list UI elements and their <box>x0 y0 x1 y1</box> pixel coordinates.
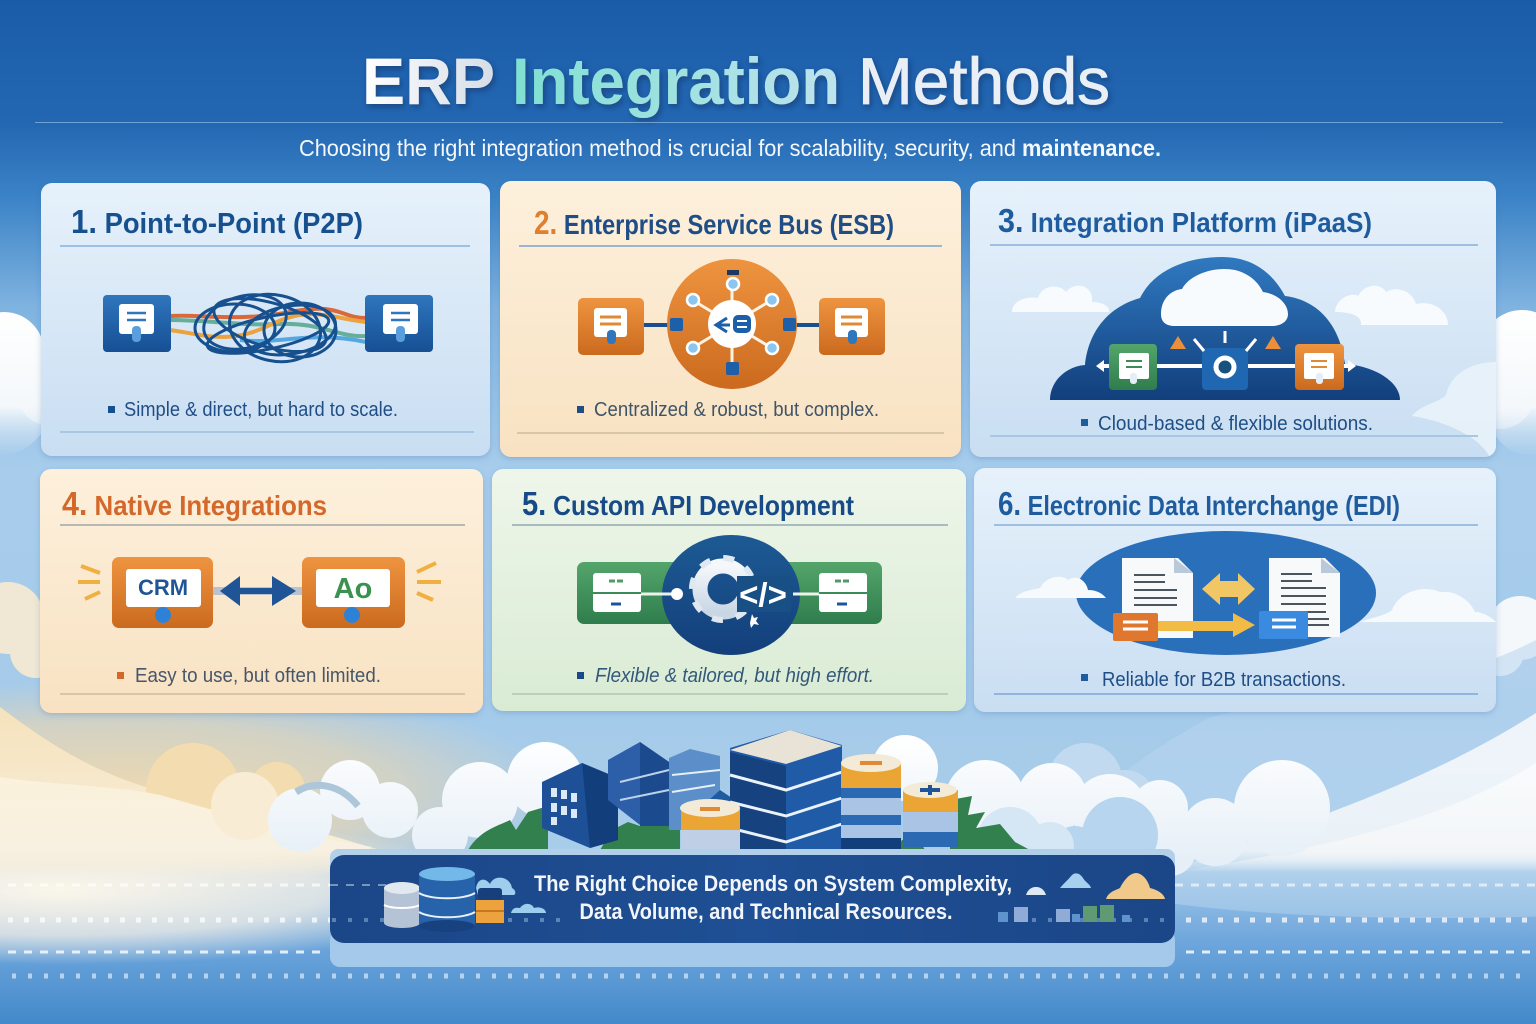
title: Methods <box>858 44 1110 118</box>
caption: point-to-point: Simple & direct, but hard to scale. <box>124 399 398 421</box>
panel: enterprise service bus <box>500 181 961 457</box>
cylinder stack 3 <box>680 799 740 850</box>
footer text: Data Volume, and Technical Resources. <box>580 899 952 924</box>
heading: native integrations: 4. Native Integrations <box>62 485 327 522</box>
caption: electronic data interchange: Reliable for B2B transactions. <box>1102 669 1346 691</box>
illustration: data centre skyline <box>468 730 1030 850</box>
heading: custom API development: 5. Custom API Development <box>522 485 854 522</box>
caption: native integrations: Easy to use, but often limited. <box>135 665 381 687</box>
heading: point-to-point: 1. Point-to-Point (P2P) <box>71 203 363 240</box>
title: Integration <box>512 44 840 118</box>
offices <box>542 763 618 848</box>
diagram: CRM to app <box>78 557 441 628</box>
icon: databases <box>384 867 546 932</box>
panel: integration platform <box>970 181 1496 458</box>
diagram: API gear: </> <box>739 576 787 613</box>
diagram: document exchange <box>1015 531 1496 655</box>
side clouds <box>0 310 1536 455</box>
diagram: API gear <box>577 535 882 655</box>
footer banner <box>330 849 1175 967</box>
title <box>362 44 1110 118</box>
hills right <box>1052 640 1536 860</box>
heading: integration platform: 3. Integration Platform (iPaaS) <box>998 202 1372 239</box>
server stack <box>730 730 842 850</box>
heading: electronic data interchange: 6. Electronic Data Interchange (EDI) <box>998 485 1400 522</box>
hills left <box>0 707 380 875</box>
foliage <box>468 796 1030 850</box>
icon: clouds and buildings <box>998 873 1165 922</box>
diagram: service bus hub <box>578 259 885 389</box>
cylinder stack 1 <box>841 754 901 850</box>
caption: integration platform: Cloud-based & flexible solutions. <box>1098 413 1373 435</box>
panel: native integrations <box>40 469 483 713</box>
heading: enterprise service bus: 2. Enterprise Service Bus (ESB) <box>534 204 894 241</box>
title: ERP <box>362 44 495 118</box>
corner cloud <box>1412 362 1496 458</box>
footer text: The Right Choice Depends on System Complexity, <box>534 871 1012 896</box>
caption: custom API development: Flexible & tailored, but high effort. <box>595 665 874 687</box>
panel: electronic data interchange <box>974 468 1496 712</box>
panel: custom API development <box>492 469 966 711</box>
diagram: cloud platform <box>1012 257 1448 400</box>
diagram: CRM to app: CRM <box>138 575 188 600</box>
subtitle: Choosing the right integration method is crucial for scalability, security, and maintenance. <box>299 135 1161 161</box>
diagram: CRM to app: Ao <box>334 573 372 605</box>
caption: enterprise service bus: Centralized & robust, but complex. <box>594 399 879 421</box>
diagram: tangled connections <box>103 286 433 370</box>
footer text <box>534 871 1012 924</box>
dotted lines <box>8 884 330 886</box>
cylinder stack 2 <box>903 782 958 847</box>
panel: point-to-point <box>41 183 490 456</box>
